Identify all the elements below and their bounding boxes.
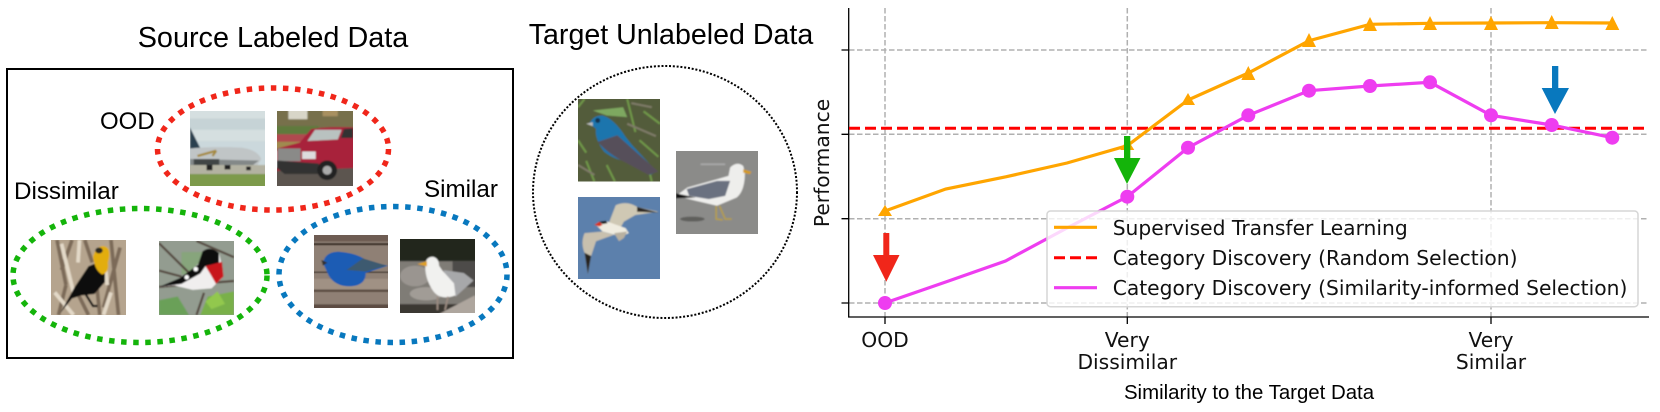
- ellipse: OOD: [158, 88, 388, 210]
- image: yellow-headed blackbird: [51, 240, 126, 315]
- image: indigo bunting on grass: [578, 99, 660, 182]
- label: dissimilar: Dissimilar: [14, 178, 119, 205]
- line: supervised transfer learning: [878, 15, 1619, 216]
- similar group: [279, 176, 507, 342]
- legend: Supervised Transfer Learning: [1113, 216, 1408, 240]
- source box: [7, 69, 513, 358]
- panel: target unlabeled data: [529, 19, 813, 318]
- image: red truck: [277, 111, 353, 186]
- ellipse: similar: [279, 206, 507, 342]
- legend: [1047, 211, 1638, 307]
- dissimilar group: [13, 178, 267, 342]
- legend: Category Discovery (Random Selection): [1113, 246, 1518, 270]
- arrow: red: [873, 233, 900, 282]
- axes: [842, 8, 1649, 324]
- label: similar: Similar: [424, 176, 498, 203]
- panel: performance chart: [810, 8, 1649, 404]
- image: rose-breasted grosbeak: [159, 241, 234, 315]
- arrow: blue: [1542, 66, 1569, 114]
- dotted circle: [533, 66, 797, 318]
- label: OOD: OOD: [100, 108, 155, 135]
- tick label: very dissimilar: Very: [1105, 328, 1150, 352]
- y-axis label: Performance: [810, 99, 834, 227]
- OOD group: [100, 88, 388, 210]
- image: indigo bunting on wood: [314, 235, 388, 308]
- x-axis label: Similarity to the Target Data: [1124, 382, 1375, 404]
- legend: Category Discovery (Similarity-informed Selection): [1113, 276, 1627, 300]
- tick label: very similar: Very: [1468, 328, 1514, 352]
- grid lines: [849, 8, 1649, 317]
- heading: target unlabeled data: Target Unlabeled Data: [529, 19, 813, 51]
- tick label: very similar: Similar: [1456, 350, 1527, 374]
- ellipse: dissimilar: [13, 208, 267, 342]
- image: herring gull: [400, 239, 475, 313]
- image: airplane: [190, 111, 265, 186]
- line: similarity-informed selection: [878, 75, 1619, 310]
- heading: source labeled data: Source Labeled Data: [138, 22, 409, 54]
- arrow: green: [1114, 136, 1140, 184]
- panel: source labeled data: [7, 22, 513, 358]
- tick label: OOD: OOD: [861, 328, 909, 352]
- image: caspian tern: [578, 197, 660, 279]
- tick label: very dissimilar: Dissimilar: [1077, 350, 1178, 374]
- line: random selection: [849, 127, 1649, 130]
- image: seagull on sand: [676, 151, 758, 234]
